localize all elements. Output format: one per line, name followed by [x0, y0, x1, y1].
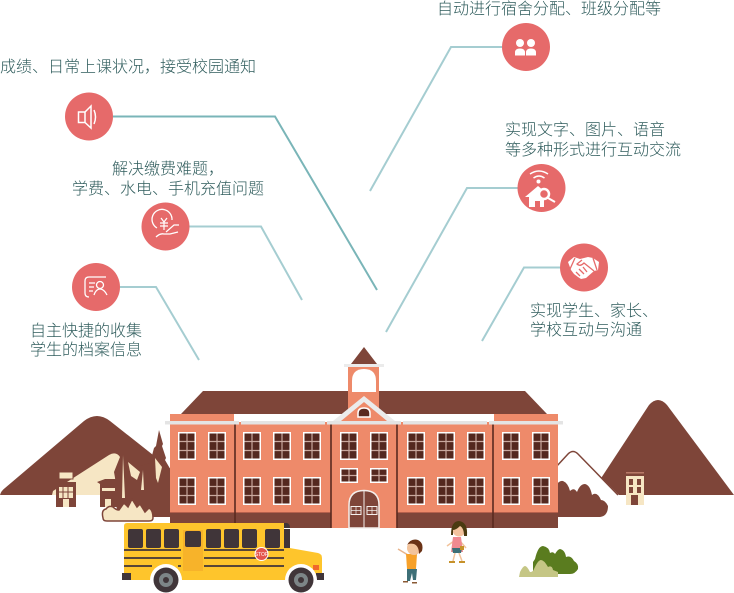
school bus [122, 523, 324, 592]
stop sign: STOP [255, 552, 269, 558]
icon: wifi house [518, 164, 566, 212]
green bush [533, 546, 578, 574]
right small house [626, 472, 644, 505]
centre small windows [340, 468, 388, 483]
facade [170, 414, 234, 422]
connector: notice [113, 116, 377, 290]
text: messaging [505, 121, 681, 159]
bus windows [128, 529, 290, 548]
front wheel [150, 564, 182, 592]
upper windows [178, 432, 550, 460]
rear wheel [285, 564, 317, 592]
right bush [556, 481, 608, 517]
boy [398, 540, 422, 584]
bumpers and light [122, 573, 131, 580]
bus door [183, 530, 203, 571]
icon: people [502, 23, 550, 71]
connector: payment [189, 226, 302, 300]
girl [447, 521, 467, 563]
connector: dorm [370, 47, 502, 191]
roof [181, 391, 547, 414]
text: profile [30, 322, 142, 359]
icon: handshake [560, 244, 608, 292]
connector: messaging [386, 188, 518, 332]
icon: speaker [65, 92, 113, 140]
school building [165, 347, 563, 528]
left building 2 [97, 479, 118, 507]
stop sign [255, 548, 269, 560]
text: payment [72, 160, 264, 198]
text: profile: 自主快捷的收集 [30, 322, 142, 340]
left cream bush [102, 499, 153, 521]
snow mountain [556, 452, 619, 495]
door [349, 490, 379, 528]
left building 1 [56, 472, 76, 507]
text: profile: 学生的档案信息 [30, 341, 142, 359]
text: payment: 学费、水电、手机充值问题 [72, 180, 264, 198]
light bush [519, 560, 558, 577]
icon: yen in hand [142, 202, 190, 250]
bell tower [344, 347, 384, 409]
icon: profile card [72, 263, 120, 311]
cornice [165, 421, 563, 424]
lower windows [178, 477, 550, 505]
text: notice: 成绩、日常上课状况，接受校园通知 [0, 58, 256, 76]
text: messaging: 等多种形式进行互动交流 [505, 141, 681, 159]
text: dorm: 自动进行宿舍分配、班级分配等 [437, 0, 661, 18]
left mountain [0, 416, 172, 512]
connector: profile [120, 287, 199, 360]
text: home-school: 学校互动与沟通 [530, 321, 642, 339]
text: home-school [530, 302, 658, 339]
connector: home-school [482, 268, 560, 341]
pillars [235, 424, 493, 528]
text: home-school: 实现学生、家长、 [530, 302, 658, 320]
right mountain [590, 400, 734, 495]
cream slope [52, 453, 120, 495]
bus stripes [124, 550, 284, 566]
text: messaging: 实现文字、图片、语音 [505, 121, 665, 139]
text: payment: 解决缴费难题， [112, 160, 224, 178]
left trees [114, 430, 172, 517]
pediment [333, 396, 395, 421]
